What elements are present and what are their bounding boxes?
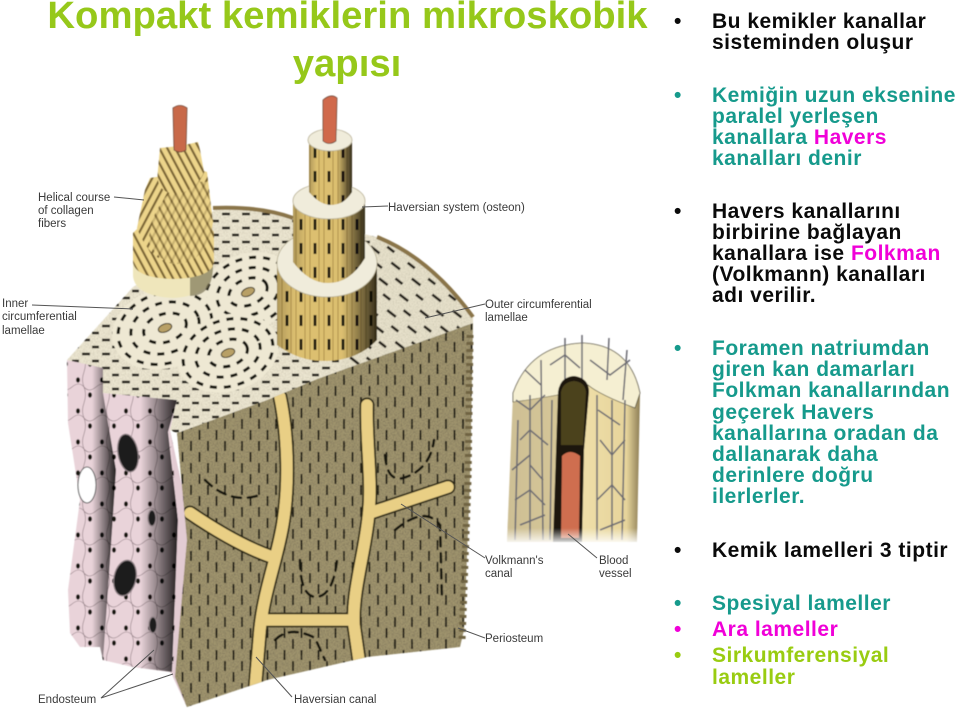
volkmann canals [190,397,448,690]
diagram labels: Blood [599,555,628,567]
periosteum rim [213,208,473,317]
tier 3 [133,222,214,279]
bullet point 4 [674,337,950,508]
text block: bone canals [674,10,956,689]
bullet point 4: Foramen natriumdan [712,337,930,360]
top cross-section surface [60,200,480,440]
bullet point 3: birbirine bağlayan [712,221,902,244]
bullet point 2: kanalları denir [712,147,862,170]
icon: dark holes [110,433,157,633]
bullet point 3: • [674,200,682,223]
diagram labels: lamellae [485,312,528,324]
tier 1 [158,142,204,194]
bullet point 4: Folkman kanallarından [712,379,950,402]
bullet point 2: Kemiğin uzun eksenine [712,84,956,107]
bullet point 6: • [674,592,682,615]
bullet point 3: adı verilir. [712,284,816,307]
bullet point 8 [674,644,889,689]
diagram labels: vessel [599,568,632,580]
inner endosteum pink surface [67,360,190,707]
bullet point 4: dallanarak daha [712,443,878,466]
bullet point 4: kanallarına oradan da [712,422,938,445]
bullet point 8: Sirkumferensiyal [712,644,889,667]
tier 1 [309,140,352,205]
diagram labels: Haversian canal [294,694,376,706]
bullet point 3: (Volkmann) kanalları [712,263,926,286]
bullet point 1 [674,10,926,54]
bullet point 4: ilerlerler. [712,485,805,508]
inset: osteon cut [500,335,645,545]
tier 3 [277,262,377,361]
diagram labels: Inner [2,298,28,310]
bullet point 2: kanallara Havers [712,126,887,149]
osteons [112,252,280,392]
front cut face [170,320,475,710]
bullet point 7: Ara lameller [712,618,838,641]
diagram labels: Helical course [38,192,110,204]
bullet point 3: kanallara ise Folkman [712,242,941,265]
bullet point 2 [674,84,956,170]
bullet point 1: sisteminden oluşur [712,31,914,54]
vessel [173,106,187,152]
bullet point 4: geçerek Havers [712,401,874,424]
central canals [157,285,256,359]
bullet point 2: • [674,84,682,107]
diagram labels: Periosteum [485,633,543,645]
diagram labels [2,192,632,706]
diagram labels: lamellae [2,325,45,337]
diagram labels: of collagen [38,205,94,217]
bone illustration [60,96,645,710]
bullet point 4: giren kan damarları [712,358,915,381]
bullet point 3 [674,200,941,307]
title: yapısı [293,42,401,85]
icon: white hole [78,467,96,503]
bullet point 1: Bu kemikler kanallar [712,10,926,33]
diagram labels: circumferential [2,311,77,323]
haversian osteon cylinder [277,96,377,361]
bullet point 5: • [674,539,682,562]
tier 2 [293,200,365,283]
bullet point 8: • [674,644,682,667]
lamellae loops [205,440,442,660]
vessel [323,96,337,144]
diagram labels: canal [485,568,512,580]
tier 2 [137,170,213,264]
leader lines [32,197,597,698]
bullet point 5: Kemik lamelleri 3 tiptir [712,539,948,562]
bullet point 2: paralel yerleşen [712,105,879,128]
blood vessel [561,452,580,538]
central canal [553,376,589,542]
bullet point 8: lameller [712,666,795,689]
diagram labels: Endosteum [38,694,96,706]
diagram labels: Haversian system (osteon) [388,202,525,214]
title [47,0,648,85]
bullet point 4: derinlere doğru [712,464,874,487]
diagram labels: Volkmann's [485,555,544,567]
helical osteon cylinder [133,106,214,298]
bullet point 6: Spesiyal lameller [712,592,891,615]
branching cell lines [512,335,630,540]
bullet point 3: Havers kanallarını [712,200,901,223]
bottom collar [133,260,213,298]
diagram labels: fibers [38,218,66,230]
bullet point 4: • [674,337,682,360]
bullet point 1: • [674,10,682,33]
bullet point 7: • [674,618,682,641]
diagram labels: Outer circumferential [485,299,592,311]
